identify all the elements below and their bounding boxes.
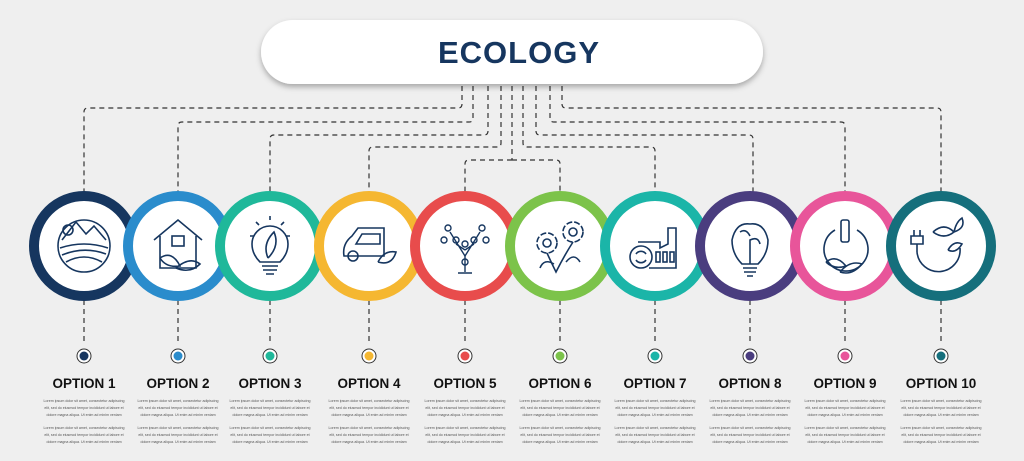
icon: plug leaves (911, 218, 963, 272)
icon: electric car (344, 228, 396, 263)
option labels: OPTION 10 (906, 376, 976, 391)
option 7 circle (605, 196, 705, 296)
icon: landscape (58, 220, 110, 272)
icon: flowers (537, 222, 583, 272)
option 10 circle (891, 196, 991, 296)
option 2 circle (128, 196, 228, 296)
option 3 circle (220, 196, 320, 296)
option 6 circle (510, 196, 610, 296)
option labels: OPTION 1 (52, 376, 116, 391)
option labels: OPTION 3 (238, 376, 302, 391)
title (261, 20, 763, 84)
icon: power leaves (824, 220, 868, 273)
option labels: OPTION 8 (718, 376, 782, 391)
option labels (52, 376, 976, 391)
icon: factory recycle (630, 228, 676, 268)
option labels: OPTION 9 (813, 376, 877, 391)
connector lines (84, 86, 941, 345)
body text (44, 399, 981, 444)
dots (77, 349, 948, 363)
option 1 circle (34, 196, 134, 296)
option 8 circle (700, 196, 800, 296)
option 9 circle (795, 196, 895, 296)
option labels: OPTION 4 (337, 376, 401, 391)
title: ECOLOGY (438, 35, 600, 70)
option labels: OPTION 6 (528, 376, 592, 391)
icon: eco house (154, 220, 202, 270)
option 4 circle (319, 196, 419, 296)
option labels: OPTION 7 (623, 376, 687, 391)
icon: leaf bulb (732, 224, 768, 276)
icon: heart tree (441, 225, 489, 273)
option 5 circle (415, 196, 515, 296)
icon: bulb leaf (250, 216, 290, 274)
option labels: OPTION 2 (146, 376, 210, 391)
option labels: OPTION 5 (433, 376, 497, 391)
